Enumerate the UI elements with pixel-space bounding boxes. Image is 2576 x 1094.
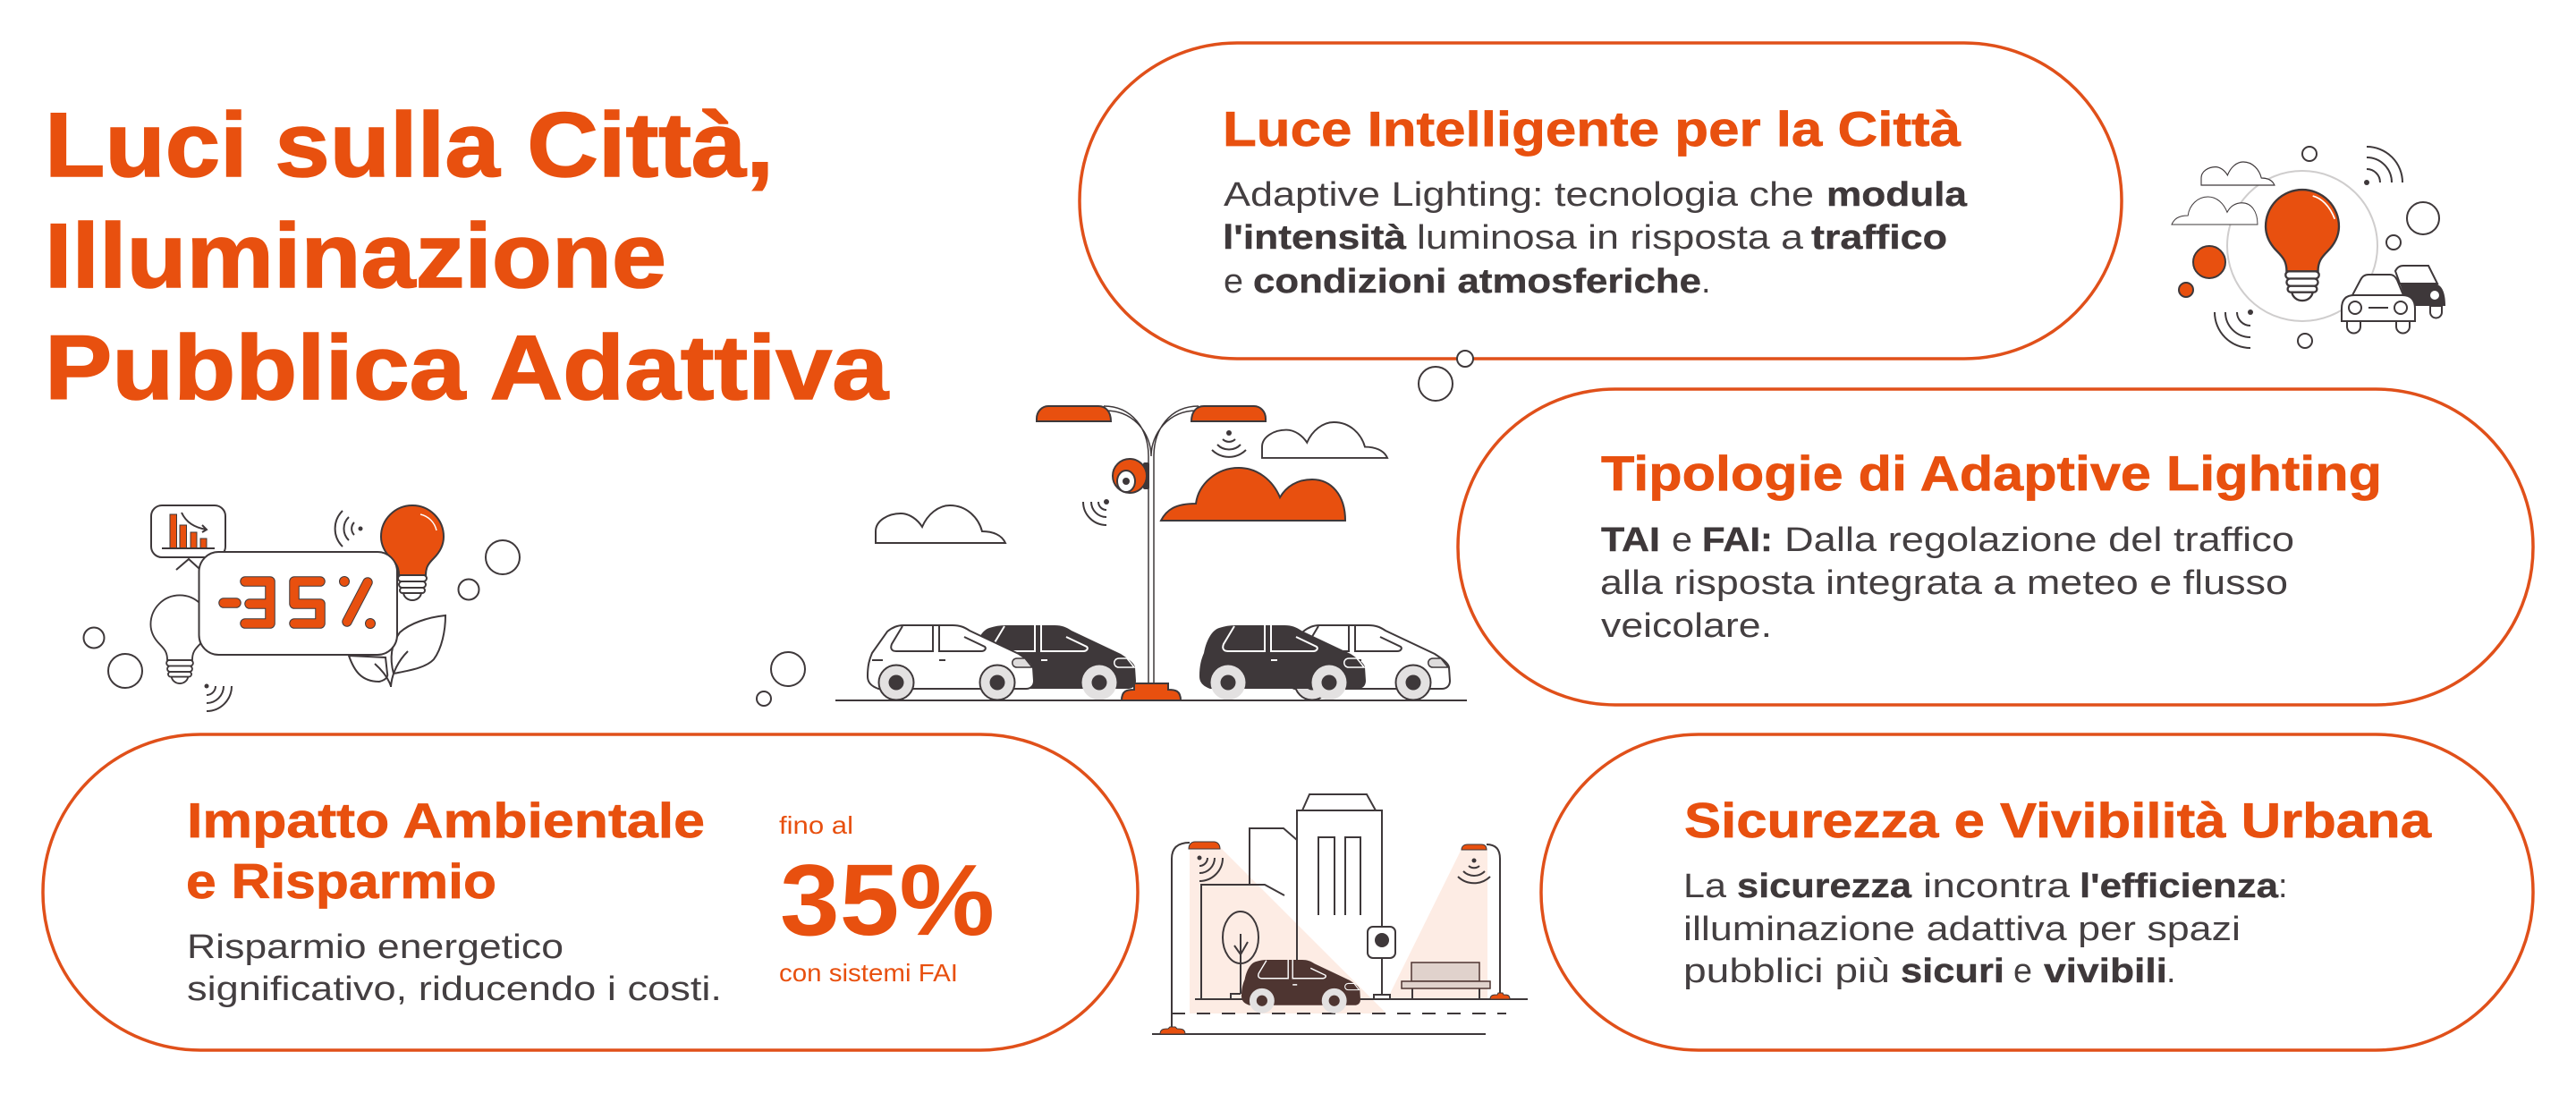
text block: Adaptive Lighting: condizioni atmosferiche bbox=[1253, 263, 1701, 301]
text block: La sicurezza: . bbox=[2166, 953, 2176, 990]
text block: Adaptive Lighting: e bbox=[1224, 263, 1243, 301]
title: Luci sulla Città, bbox=[45, 94, 774, 196]
text block: Risparmio energetico bbox=[187, 929, 722, 1008]
icon: bench bbox=[1402, 963, 1490, 999]
statistic: fino al 35% con sistemi FAI: con sistemi FAI bbox=[779, 959, 958, 987]
text block: Adaptive Lighting: . bbox=[1701, 263, 1711, 301]
icon: signal right lamp bbox=[1458, 859, 1490, 883]
icon: right outline cloud bbox=[1262, 422, 1387, 458]
statistic: fino al 35% con sistemi FAI: fino al bbox=[779, 811, 853, 839]
icon: signal right bbox=[1212, 430, 1246, 457]
light beam right bbox=[1387, 849, 1487, 999]
icon: ground and road bbox=[1152, 999, 1528, 1034]
icon: traffic sensor bbox=[1368, 927, 1395, 999]
panel: Tipologie di Adaptive Lighting bbox=[1458, 389, 2533, 705]
icon: outline bulb bbox=[150, 595, 209, 683]
panel: Luce Intelligente per la Città bbox=[1080, 43, 2122, 359]
icon: right lamp bbox=[1462, 844, 1510, 999]
icon: left lamp bbox=[1160, 842, 1220, 1034]
text block: TAI e FAI: veicolare. bbox=[1601, 607, 1772, 645]
icon: dark car right bbox=[1199, 625, 1366, 700]
text block: Adaptive Lighting: l'intensità bbox=[1223, 219, 1407, 257]
text block: La sicurezza: pubblici più bbox=[1683, 953, 1890, 990]
digits: -35% bbox=[224, 576, 376, 628]
title: Pubblica Adattiva bbox=[45, 317, 889, 419]
statistic: fino al 35% con sistemi FAI bbox=[779, 811, 995, 987]
text block: La sicurezza: La bbox=[1683, 868, 1727, 905]
text block: La sicurezza: sicurezza bbox=[1737, 868, 1912, 905]
heading: Impatto Ambientale: e Risparmio bbox=[186, 853, 496, 909]
light beam left bbox=[1190, 848, 1386, 1013]
display box bbox=[199, 552, 397, 655]
text block: Risparmio energetico: significativo, riducendo i costi. bbox=[187, 971, 722, 1008]
heading: Tipologie: Tipologie di Adaptive Lighting bbox=[1601, 445, 2382, 501]
heading: Impatto Ambientale: Impatto Ambientale bbox=[187, 793, 705, 848]
title bbox=[45, 94, 889, 419]
illustration: urban safety scene bbox=[1152, 794, 1528, 1034]
icon: chart board bbox=[151, 505, 225, 570]
decorative circles bbox=[84, 540, 520, 688]
text block: Risparmio energetico: Risparmio energetico bbox=[187, 929, 564, 966]
icon: sensor camera bbox=[1113, 459, 1149, 493]
statistic: fino al 35% con sistemi FAI: 35% bbox=[780, 844, 995, 956]
icon: white car right bbox=[1284, 625, 1450, 700]
decorative circles near cars bbox=[757, 652, 805, 706]
text block: La sicurezza bbox=[1683, 868, 2288, 990]
text block: Adaptive Lighting: traffico bbox=[1811, 219, 1947, 257]
heading: Sicurezza: Sicurezza e Vivibilità Urbana bbox=[1684, 793, 2431, 848]
icon: lamp post bbox=[1037, 406, 1266, 700]
icon: smart bulb with clouds and traffic bbox=[2172, 147, 2445, 348]
text block: La sicurezza: sicuri bbox=[1901, 953, 2004, 990]
icon: signal left bbox=[1083, 499, 1109, 525]
icon: signal top bbox=[335, 511, 363, 547]
text block: La sicurezza: e bbox=[2013, 953, 2032, 990]
icon: leaves bbox=[349, 615, 445, 687]
icon: orange cloud bbox=[1161, 468, 1345, 521]
icon: signal left lamp bbox=[1197, 855, 1223, 881]
heading: Impatto Ambientale bbox=[186, 793, 705, 909]
illustration: adaptive street lamp with cars bbox=[835, 406, 1467, 700]
icon: car bbox=[1241, 960, 1360, 1013]
text block: TAI e FAI: TAI bbox=[1601, 522, 1660, 559]
text block: La sicurezza: l'efficienza bbox=[2080, 868, 2279, 905]
icon: orange bulb bbox=[381, 505, 444, 600]
heading: Luce Intelligente: Luce Intelligente per la Città bbox=[1223, 101, 1961, 157]
text block: La sicurezza: incontra bbox=[1923, 868, 2071, 905]
text block: Adaptive Lighting: Adaptive Lighting: tecnologia che bbox=[1224, 176, 1814, 214]
text block: Adaptive Lighting: modula bbox=[1826, 176, 1968, 214]
text block: La sicurezza: vivibili bbox=[2044, 953, 2167, 990]
panel: Impatto Ambientale e Risparmio bbox=[43, 734, 1138, 1050]
text block: TAI e FAI: Dalla regolazione del traffico bbox=[1784, 522, 2294, 559]
thought bubble circles bbox=[1419, 351, 1473, 401]
text block: Adaptive Lighting: luminosa in risposta a bbox=[1417, 219, 1804, 257]
icon: dark car left bbox=[970, 625, 1136, 700]
text block: La sicurezza: : bbox=[2278, 868, 2288, 905]
text block: Adaptive Lighting bbox=[1223, 176, 1968, 301]
icon: buildings bbox=[1201, 794, 1382, 999]
text block: TAI e FAI bbox=[1600, 522, 2294, 645]
text block: TAI e FAI: e bbox=[1672, 522, 1692, 559]
text block: La sicurezza: illuminazione adattiva per spazi bbox=[1683, 911, 2241, 948]
icon: signal bottom bbox=[204, 683, 232, 711]
title: Illuminazione bbox=[45, 205, 666, 307]
icon: white car left bbox=[868, 625, 1034, 700]
text block: TAI e FAI: FAI: bbox=[1702, 522, 1773, 559]
illustration: -35% display bbox=[84, 505, 520, 711]
icon: tree bbox=[1223, 912, 1258, 999]
panel: Sicurezza e Vivibilità Urbana bbox=[1541, 734, 2533, 1050]
icon: left outline cloud bbox=[876, 505, 1005, 543]
text block: TAI e FAI: alla risposta integrata a meteo e flusso bbox=[1600, 564, 2288, 602]
